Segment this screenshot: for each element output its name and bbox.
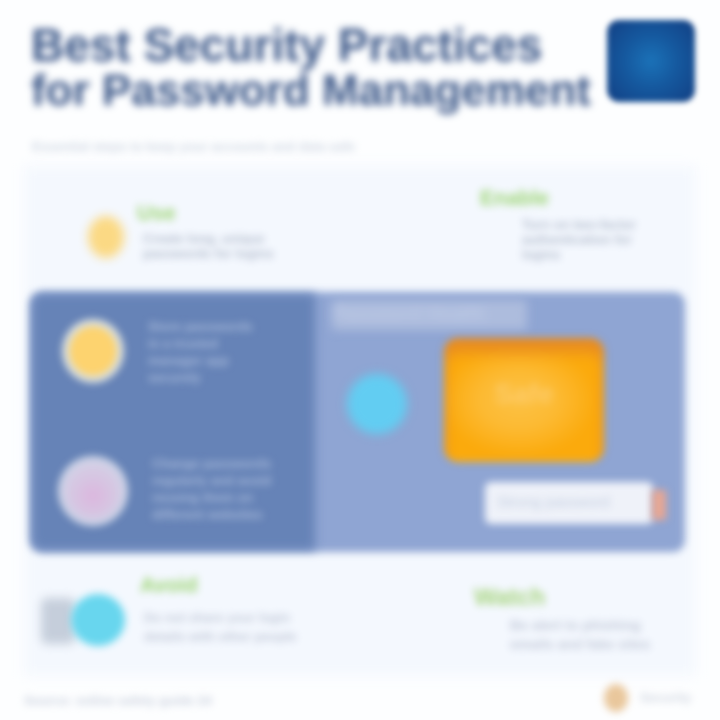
text: bottom left: details with other people <box>144 629 296 644</box>
text: tip two: different websites <box>152 507 263 522</box>
bar tip <box>652 490 666 520</box>
text: top left: Create long, unique <box>143 231 264 246</box>
icon: cyan circle <box>71 594 125 646</box>
panel background <box>30 292 685 552</box>
text: tip two: Change passwords <box>152 456 271 471</box>
text: top right <box>520 217 636 264</box>
icon: logo mark <box>604 684 628 712</box>
heading band: right panel <box>332 300 527 330</box>
item: bottom right <box>470 584 650 652</box>
text: tip two: reusing them on <box>152 490 253 505</box>
heading: bottom right: Watch <box>474 584 545 611</box>
title: Best Security Practices <box>31 19 542 71</box>
title: for Password Management <box>31 66 591 115</box>
text: bottom right <box>508 617 650 652</box>
text: bottom right: emails and fake sites <box>510 636 650 652</box>
text: tip one: securely <box>148 370 201 385</box>
panel: left column <box>32 294 315 550</box>
card: orange <box>444 338 604 462</box>
background panel <box>24 166 696 676</box>
heading: top left: Use <box>137 202 176 225</box>
icon: yellow circle <box>88 216 124 258</box>
icon: cyan circle <box>347 374 407 434</box>
bar text: Strong password <box>497 494 610 511</box>
item: bottom left <box>36 573 296 652</box>
icon: header badge <box>607 20 695 102</box>
bar: password strength <box>480 477 671 529</box>
heading: bottom left: Avoid <box>140 574 198 597</box>
text: bottom left: Do not share your login <box>144 610 290 625</box>
text: top left: passwords for logins <box>143 246 274 261</box>
text: tip one <box>147 319 254 385</box>
text: tip one: manager app <box>148 353 229 368</box>
text: bottom left <box>143 610 296 644</box>
text: tip two <box>151 456 273 522</box>
text: top right: authentication for <box>522 232 632 247</box>
text: tip one: Store passwords <box>148 319 253 334</box>
item: top right <box>476 185 636 264</box>
subtitle: Essential steps to keep your accounts and data safe <box>32 139 355 154</box>
title <box>27 19 595 120</box>
heading: top right: Enable <box>480 187 549 210</box>
footer: source text: Source: online safety guide 24 <box>24 693 212 708</box>
heading band: right panel: Password Health <box>332 304 485 325</box>
bar white <box>485 482 653 524</box>
panel: main <box>23 285 690 559</box>
text: tip one: in a trusted <box>148 336 218 351</box>
card text: Safe <box>494 378 554 409</box>
footer: logo <box>599 680 691 716</box>
text: top left <box>141 231 274 262</box>
text: bottom right: Be alert to phishing <box>510 617 641 633</box>
icon: grey tile <box>41 598 75 644</box>
item: top left <box>82 202 274 264</box>
text: tip two: regularly and avoid <box>152 473 271 488</box>
icon: lilac circle with ring <box>64 462 122 520</box>
icon: yellow circle with ring <box>69 326 117 376</box>
text: top right: Turn on two-factor <box>522 217 636 232</box>
text: top right: logins <box>522 247 560 262</box>
logo text: Security <box>640 690 691 705</box>
